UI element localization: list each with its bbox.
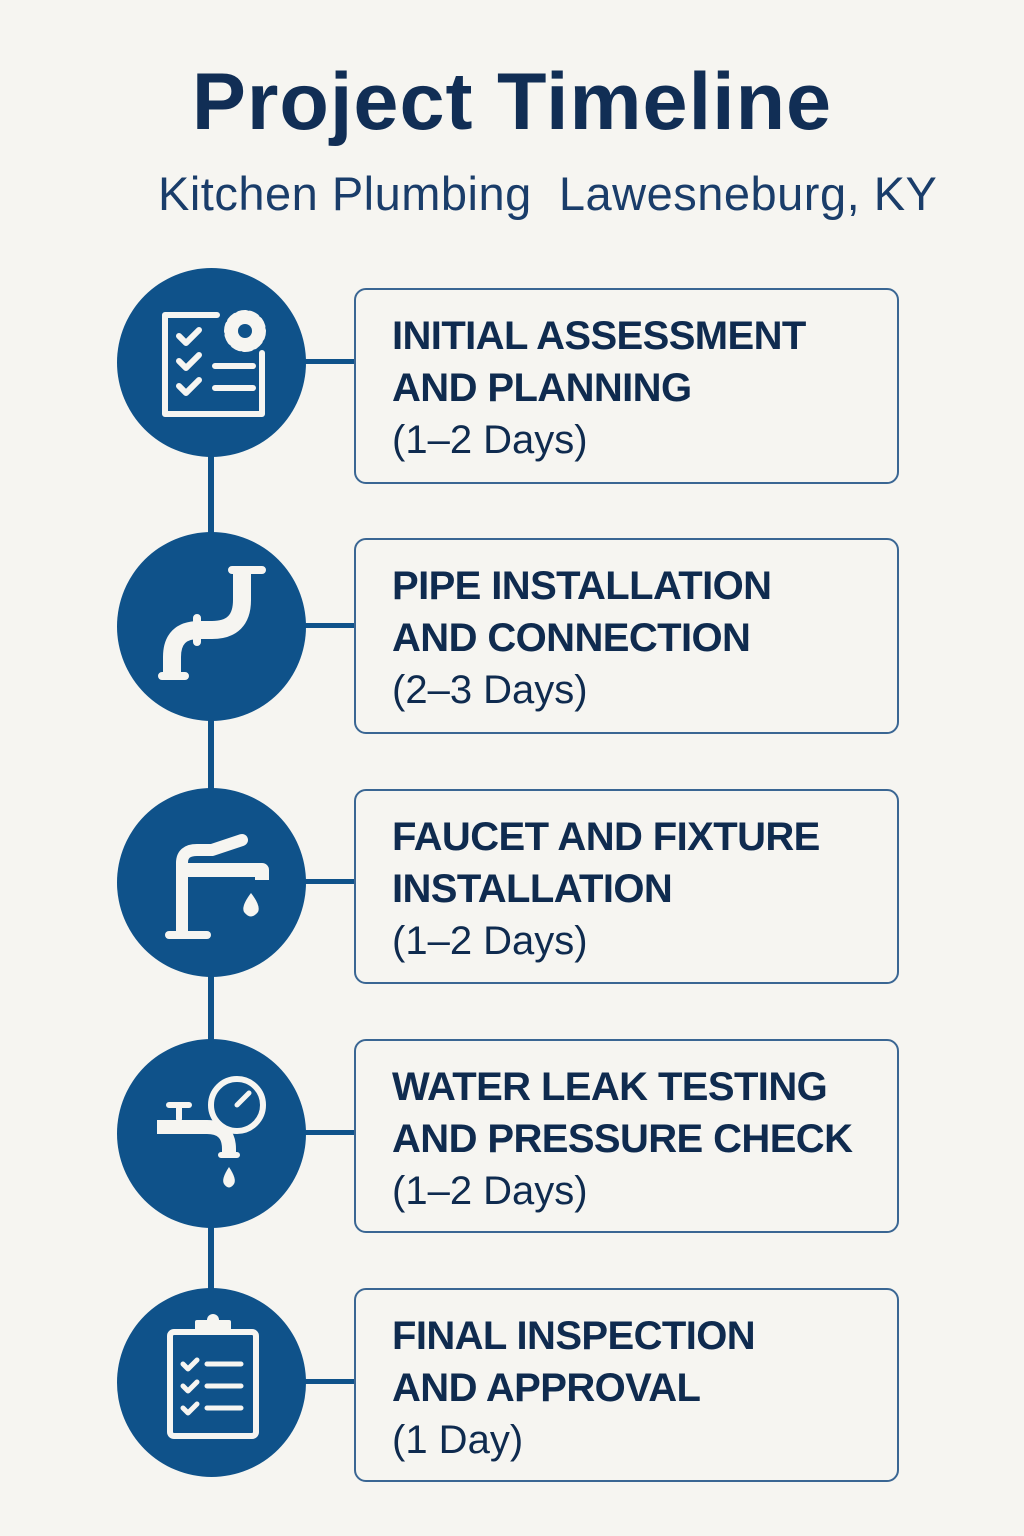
card: final inspection: (1 Day) <box>392 1418 523 1462</box>
connector <box>300 1379 356 1384</box>
step 2 <box>117 532 899 734</box>
card: initial assessment: (1–2 Days) <box>392 418 588 462</box>
icon: tap with pressure gauge <box>117 1039 306 1228</box>
card: faucet <box>354 789 899 984</box>
step 4 <box>117 1039 899 1233</box>
card: pipe installation: PIPE INSTALLATION <box>392 564 771 608</box>
step 3 <box>117 788 899 984</box>
card: final inspection: AND APPROVAL <box>392 1366 700 1410</box>
card: faucet: FAUCET AND FIXTURE <box>392 815 820 859</box>
step 1 <box>117 268 899 484</box>
timeline vertical line <box>208 360 214 1380</box>
icon: checklist with gear <box>117 268 306 457</box>
card: final inspection <box>354 1288 899 1482</box>
card: initial assessment: AND PLANNING <box>392 366 691 410</box>
card: initial assessment: INITIAL ASSESSMENT <box>392 314 806 358</box>
card: pipe installation: AND CONNECTION <box>392 616 750 660</box>
step 5 <box>117 1288 899 1482</box>
connector <box>300 879 356 884</box>
icon: clipboard <box>117 1288 306 1477</box>
card: leak testing: (1–2 Days) <box>392 1169 588 1213</box>
card: final inspection: FINAL INSPECTION <box>392 1314 755 1358</box>
card: faucet: (1–2 Days) <box>392 919 588 963</box>
connector <box>300 359 356 364</box>
card: initial assessment <box>354 288 899 484</box>
icon: pipe <box>117 532 306 721</box>
card: leak testing: AND PRESSURE CHECK <box>392 1117 852 1161</box>
connector <box>300 1130 356 1135</box>
card: pipe installation: (2–3 Days) <box>392 668 588 712</box>
title: Project Timeline <box>192 57 832 147</box>
subtitle: Kitchen Plumbing Lawesneburg, KY <box>158 167 937 220</box>
card: leak testing: WATER LEAK TESTING <box>392 1065 827 1109</box>
icon: faucet <box>117 788 306 977</box>
card: leak testing <box>354 1039 899 1233</box>
connector <box>300 623 356 628</box>
card: pipe installation <box>354 538 899 734</box>
card: faucet: INSTALLATION <box>392 867 672 911</box>
